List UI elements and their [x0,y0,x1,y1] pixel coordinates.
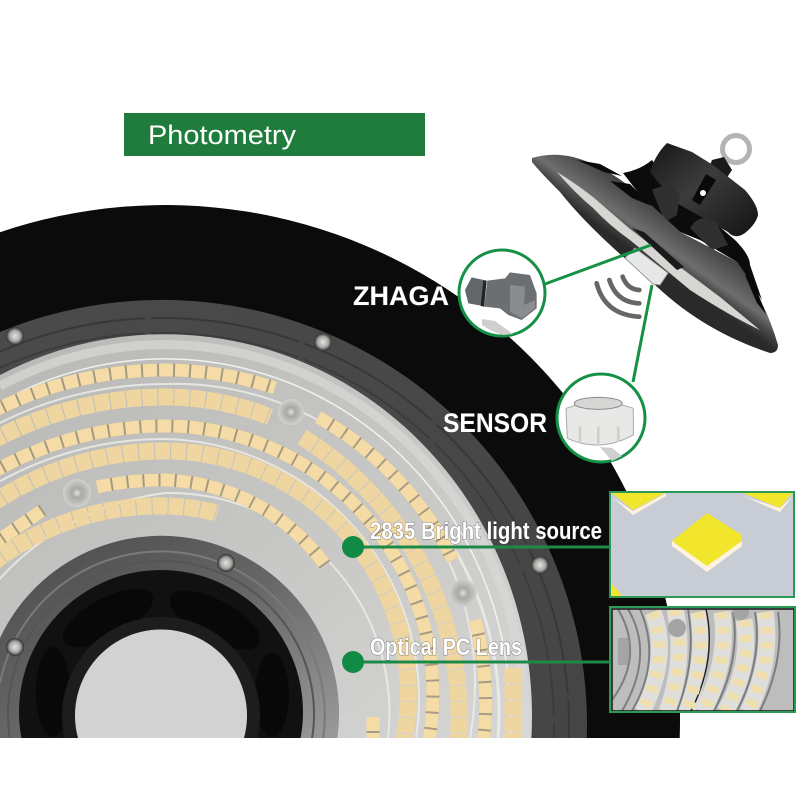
label: SENSOR: SENSOR [443,408,547,438]
icon: sensor puck [566,397,633,445]
inset: optical PC lens [610,604,795,712]
LED rows: base shadow for narrow rows [0,370,486,745]
ring highlights between LED rows [0,384,499,738]
SENSOR callout circle [557,374,645,462]
LED rows: wide chips under lens [0,397,513,745]
inset: 2835 LED chips [610,492,794,597]
lens dimples [63,399,477,607]
driver housing [650,143,758,236]
white centre disc [75,629,247,738]
shade slots [577,160,766,314]
ZHAGA callout circle [459,250,545,336]
callout line: light source [342,536,610,558]
title banner [124,113,425,156]
lens strip [557,172,760,330]
inner grey mounting ring [0,536,339,738]
icon: zhaga connector [465,272,537,320]
bolt slot highlight [692,174,716,205]
screws [6,327,549,656]
black centre with vent holes [19,570,303,738]
white sensor puck [625,248,668,285]
LED board disc [0,334,532,738]
label: ZHAGA: ZHAGA [353,281,449,311]
outer grey bezel ring [0,300,587,738]
LED rows: narrow chips [0,370,486,745]
label: Optical PC Lens: Optical PC Lens [370,634,522,661]
black housing [0,205,680,738]
heat sink fins [623,160,762,300]
zhaga slot [632,228,684,270]
sensing wave icon [597,277,639,317]
lamp close-up: underside of the high bay [0,205,680,745]
glossy arms [652,186,728,250]
shade [532,155,778,353]
label: 2835 Bright light source: 2835 Bright light source [370,518,602,545]
leader lines to lamp [545,245,652,382]
product photo: high bay lamp [532,136,778,353]
callout line: lens [342,651,610,673]
title banner: Photometry [148,120,297,150]
eye bolt [698,136,750,200]
